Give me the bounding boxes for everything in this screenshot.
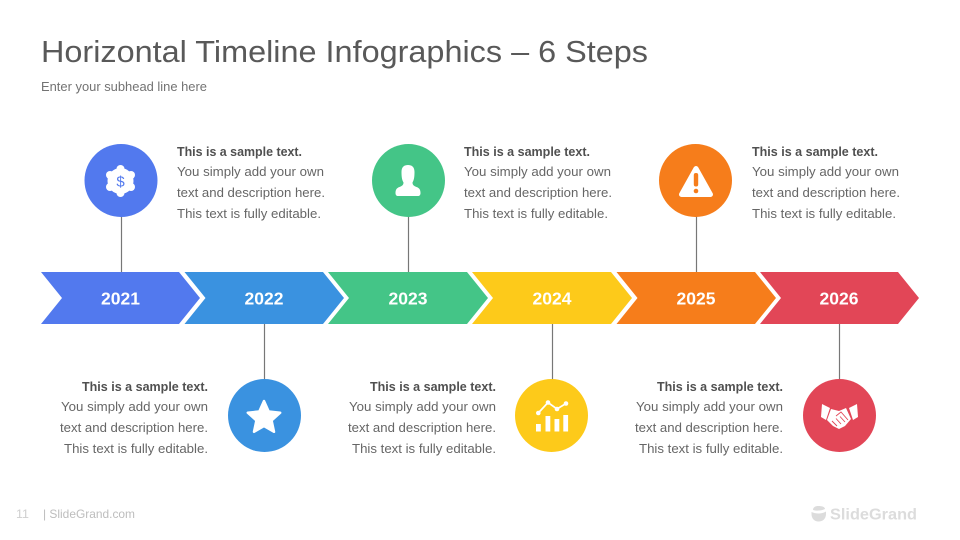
icon: person [372,144,445,217]
arrow: 2026 [760,272,919,324]
text block: 2022: This text is fully editable. [64,442,208,456]
text block: 2023: This text is fully editable. [464,207,608,221]
text block: 2023: This is a sample text. [464,145,590,159]
text block: 2021: This is a sample text. [177,145,302,159]
text block: 2024: text and description here. [348,421,496,435]
text block: 2023: text and description here. [464,186,612,200]
text block: 2022 [60,380,208,456]
text block: 2021 [177,145,325,221]
text block: 2023: You simply add your own [464,165,611,179]
text block: 2021: This text is fully editable. [177,207,321,221]
text block: 2024: You simply add your own [349,400,496,414]
icon: chart [515,379,588,452]
arrow: 2025: 2025 [677,288,716,308]
arrow: 2023 [328,272,488,324]
footer site: | SlideGrand.com [43,507,135,521]
page number: 11 [16,507,29,521]
text block: 2026: This text is fully editable. [639,442,783,456]
text block: 2025: This text is fully editable. [752,207,896,221]
text block: 2026 [635,380,783,456]
text block: 2024: This is a sample text. [370,380,496,394]
arrow: 2022 [184,272,344,324]
text block: 2022: This is a sample text. [82,380,208,394]
text block: 2025 [752,145,900,221]
text block: 2025: text and description here. [752,186,900,200]
arrow: 2022: 2022 [245,288,284,308]
arrow: 2021 [41,272,200,324]
icon: warning [659,144,732,217]
icon: handshake [803,379,876,452]
text block: 2023 [464,145,612,221]
arrow: 2026: 2026 [820,288,859,308]
arrow: 2024: 2024 [533,288,572,308]
text block: 2024: This text is fully editable. [352,442,496,456]
text block: 2024 [348,380,496,456]
title: Horizontal Timeline Infographics – 6 Steps [41,34,648,69]
text block: 2026: text and description here. [635,421,783,435]
subhead: Enter your subhead line here [41,80,207,94]
arrow: 2023: 2023 [389,288,428,308]
icon: star [228,379,301,452]
icon: gear with dollar [84,144,158,217]
icon: gear with dollar: $ [116,174,125,190]
text block: 2022: text and description here. [60,421,208,435]
arrow: 2025 [616,272,776,324]
connector lines [122,216,840,380]
logo: SlideGrand: SlideGrand [830,506,917,524]
arrow: 2024 [472,272,632,324]
text block: 2026: This is a sample text. [657,380,783,394]
text block: 2025: You simply add your own [752,165,899,179]
timeline arrow band [41,272,919,324]
text block: 2022: You simply add your own [61,400,208,414]
text block: 2025: This is a sample text. [752,145,878,159]
text block: 2026: You simply add your own [636,400,783,414]
text block: 2021: text and description here. [177,186,325,200]
arrow: 2021: 2021 [101,288,140,308]
text block: 2021: You simply add your own [177,165,324,179]
